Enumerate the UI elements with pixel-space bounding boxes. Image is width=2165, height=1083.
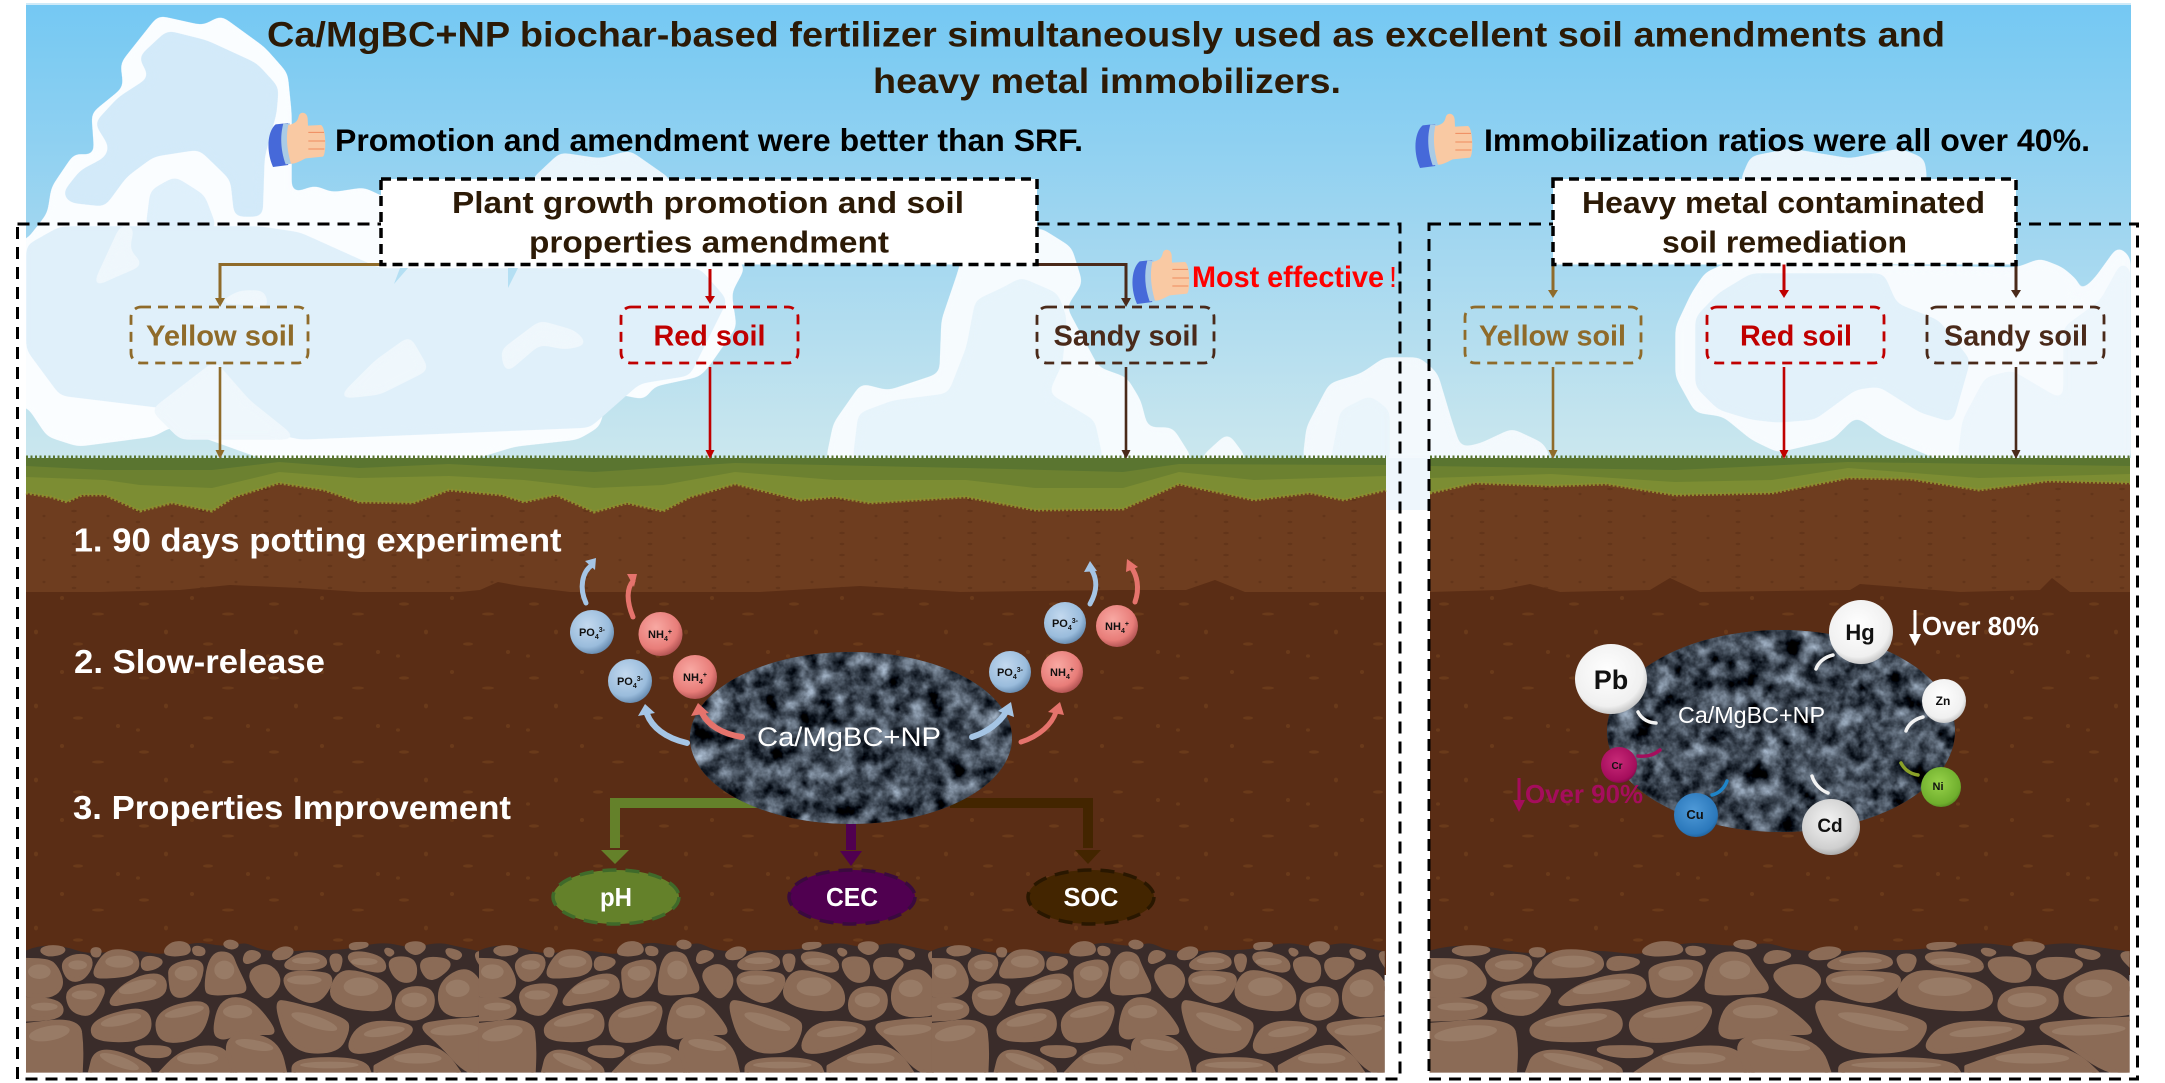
metal ion: Cr: Cr <box>1611 761 1623 772</box>
ion NH4 lower right: 4 <box>1066 674 1070 681</box>
cloud: large left cumulus <box>10 15 746 462</box>
connectors: right heading to soil boxes <box>1548 262 2021 298</box>
step labels: 3. Properties Improvement <box>73 790 511 827</box>
icon: thumbs up <box>1415 114 1472 168</box>
title: Ca/MgBC+NP biochar-based fertilizer simultaneously used as excellent soil amendments and <box>267 14 1945 54</box>
ground scene: left panel <box>21 457 1391 1078</box>
soil layer: grass strata, right <box>1430 457 2130 495</box>
soil box: yellow soil, right <box>1465 307 1641 363</box>
cloud: top cloud behind first heading box <box>525 150 680 185</box>
metal ion: Cu <box>1674 793 1718 837</box>
callout: over 90 percent: Over 90% <box>1525 779 1643 809</box>
soil box: red soil, left <box>621 307 798 363</box>
callout: promotion better than SRF: Promotion and amendment were better than SRF. <box>335 122 1083 158</box>
adsorption arrows <box>1638 655 1923 795</box>
bedrock stones, right <box>1422 942 2140 1078</box>
ion NH4 upper left: NH <box>648 629 664 641</box>
ion NH4 lower left: + <box>703 672 707 679</box>
ground scene: right panel <box>1422 457 2140 1078</box>
ion PO4 upper right: PO <box>1052 618 1068 630</box>
soil box: sandy soil, right: Sandy soil <box>1944 320 2088 352</box>
heading box: heavy metal remediation: soil remediation <box>1662 226 1907 260</box>
ion NH4 lower left <box>673 655 717 699</box>
metal ion: Pb <box>1575 644 1647 714</box>
callout: most effective <box>1132 250 1397 304</box>
metal ion: Hg <box>1829 600 1893 664</box>
soil box: red soil, right <box>1707 307 1884 363</box>
gap strip between the two ground scenes <box>1386 458 1430 510</box>
ion PO4 upper right <box>1044 602 1086 644</box>
ion PO4 upper left: 4 <box>595 634 599 641</box>
ion PO4 lower right: 3- <box>1017 667 1024 674</box>
title: heavy metal immobilizers. <box>873 61 1341 101</box>
step labels <box>73 523 562 827</box>
soil box: red soil, right: Red soil <box>1740 320 1852 352</box>
soil box: yellow soil, right: Yellow soil <box>1479 320 1626 352</box>
bedrock stones, left <box>21 942 1391 1078</box>
soil box: yellow soil, left: Yellow soil <box>146 320 295 352</box>
metal ion: Ni: Ni <box>1932 781 1944 793</box>
soil box: red soil, left: Red soil <box>654 320 766 352</box>
icon: thumbs up <box>1132 250 1189 304</box>
soil layer: grass strata <box>26 457 1386 512</box>
title <box>267 14 1945 101</box>
property oval: CEC <box>789 870 915 924</box>
soil box: sandy soil, right <box>1927 307 2104 363</box>
callout: most effective: ! <box>1389 262 1397 294</box>
step labels: 2. Slow-release <box>74 644 325 681</box>
ion NH4 upper right: NH <box>1105 621 1121 633</box>
ion PO4 upper right: 3- <box>1072 618 1079 625</box>
heading box: heavy metal remediation <box>1553 179 2016 264</box>
connectors: left heading to soil boxes <box>215 264 1131 307</box>
panel border: heavy metal remediation <box>1429 224 2138 1079</box>
nutrient ions: PO4 and NH4 <box>570 602 1138 703</box>
property oval: pH <box>553 870 679 924</box>
heading box: heavy metal remediation: Heavy metal contaminated <box>1582 186 1985 220</box>
metal ion: Cu: Cu <box>1686 807 1704 822</box>
cloud: centre cumulus <box>825 227 1250 462</box>
metal ion: Zn: Zn <box>1936 694 1950 708</box>
ion NH4 lower left: 4 <box>699 679 703 686</box>
metal ion: Cd: Cd <box>1817 816 1843 837</box>
biochar ellipse: left <box>690 652 1013 824</box>
arrows: soil boxes down to ground <box>216 367 2020 459</box>
background: sky and clouds <box>0 0 2165 470</box>
ion PO4 upper right: 4 <box>1068 625 1072 632</box>
biochar ellipse: right: Ca/MgBC+NP <box>1678 702 1825 728</box>
ion PO4 lower right <box>989 651 1031 693</box>
ion PO4 upper left: PO <box>579 627 595 639</box>
step labels: 1. 90 days potting experiment <box>74 523 562 560</box>
ion NH4 lower right <box>1041 651 1083 693</box>
property oval: pH: pH <box>600 882 632 912</box>
ion PO4 lower left: PO <box>617 676 633 688</box>
release arrows <box>582 558 1138 743</box>
heading box: plant growth promotion: properties amendment <box>529 226 889 260</box>
biochar ellipse: right <box>1607 630 1955 832</box>
ion NH4 lower right: + <box>1070 667 1074 674</box>
metal ion: Zn <box>1922 679 1966 723</box>
ion PO4 lower left: 4 <box>633 683 637 690</box>
cloud: gap-side cumulus <box>1302 357 1553 462</box>
callout: most effective: Most effective <box>1192 261 1384 294</box>
ion PO4 lower left: 3- <box>637 676 644 683</box>
callout: immobilization ratios: Immobilization ratios were all over 40%. <box>1484 122 2090 158</box>
property oval: SOC: SOC <box>1064 882 1119 912</box>
ion PO4 lower left <box>608 659 652 703</box>
heading box: plant growth promotion: Plant growth promotion and soil <box>452 186 964 220</box>
panel border: plant growth <box>18 224 1400 1079</box>
ion PO4 upper left: 3- <box>599 627 606 634</box>
soil box: sandy soil, left: Sandy soil <box>1054 320 1198 352</box>
ion NH4 upper right <box>1096 605 1138 647</box>
ion PO4 lower right: PO <box>997 667 1013 679</box>
property oval: CEC: CEC <box>826 882 878 912</box>
ion NH4 lower left: NH <box>683 672 699 684</box>
ion PO4 upper left <box>570 610 614 654</box>
ion PO4 lower right: 4 <box>1013 674 1017 681</box>
property arrows from biochar <box>601 803 1101 866</box>
ion NH4 upper left: 4 <box>664 636 668 643</box>
mask: clear anything past sky edges <box>0 0 2165 470</box>
ion NH4 lower right: NH <box>1050 667 1066 679</box>
callout: promotion better than SRF <box>268 113 1083 167</box>
icon: thumbs up <box>268 113 325 167</box>
metal ion: Cd <box>1802 799 1860 855</box>
soil box: yellow soil, left <box>131 307 308 363</box>
property oval: SOC <box>1028 870 1154 924</box>
callout: immobilization ratios <box>1415 114 2090 168</box>
cloud: right cumulus <box>1675 245 2131 462</box>
metal ion: Ni <box>1921 767 1961 807</box>
metal ion: Pb: Pb <box>1594 665 1628 695</box>
ion NH4 upper left: + <box>668 629 672 636</box>
heading box: plant growth promotion <box>381 179 1037 264</box>
biochar ellipse: left: Ca/MgBC+NP <box>757 722 941 752</box>
metal ion: Hg: Hg <box>1845 620 1875 645</box>
soil box: sandy soil, left <box>1037 307 1214 363</box>
metal ion: Cr <box>1601 747 1637 783</box>
callout: over 80 percent: Over 80% <box>1922 611 2039 641</box>
ion NH4 upper right: 4 <box>1121 628 1125 635</box>
cloud: upper right behind second heading box <box>1738 148 1928 185</box>
ion NH4 upper right: + <box>1125 621 1129 628</box>
ion NH4 upper left <box>638 612 682 656</box>
